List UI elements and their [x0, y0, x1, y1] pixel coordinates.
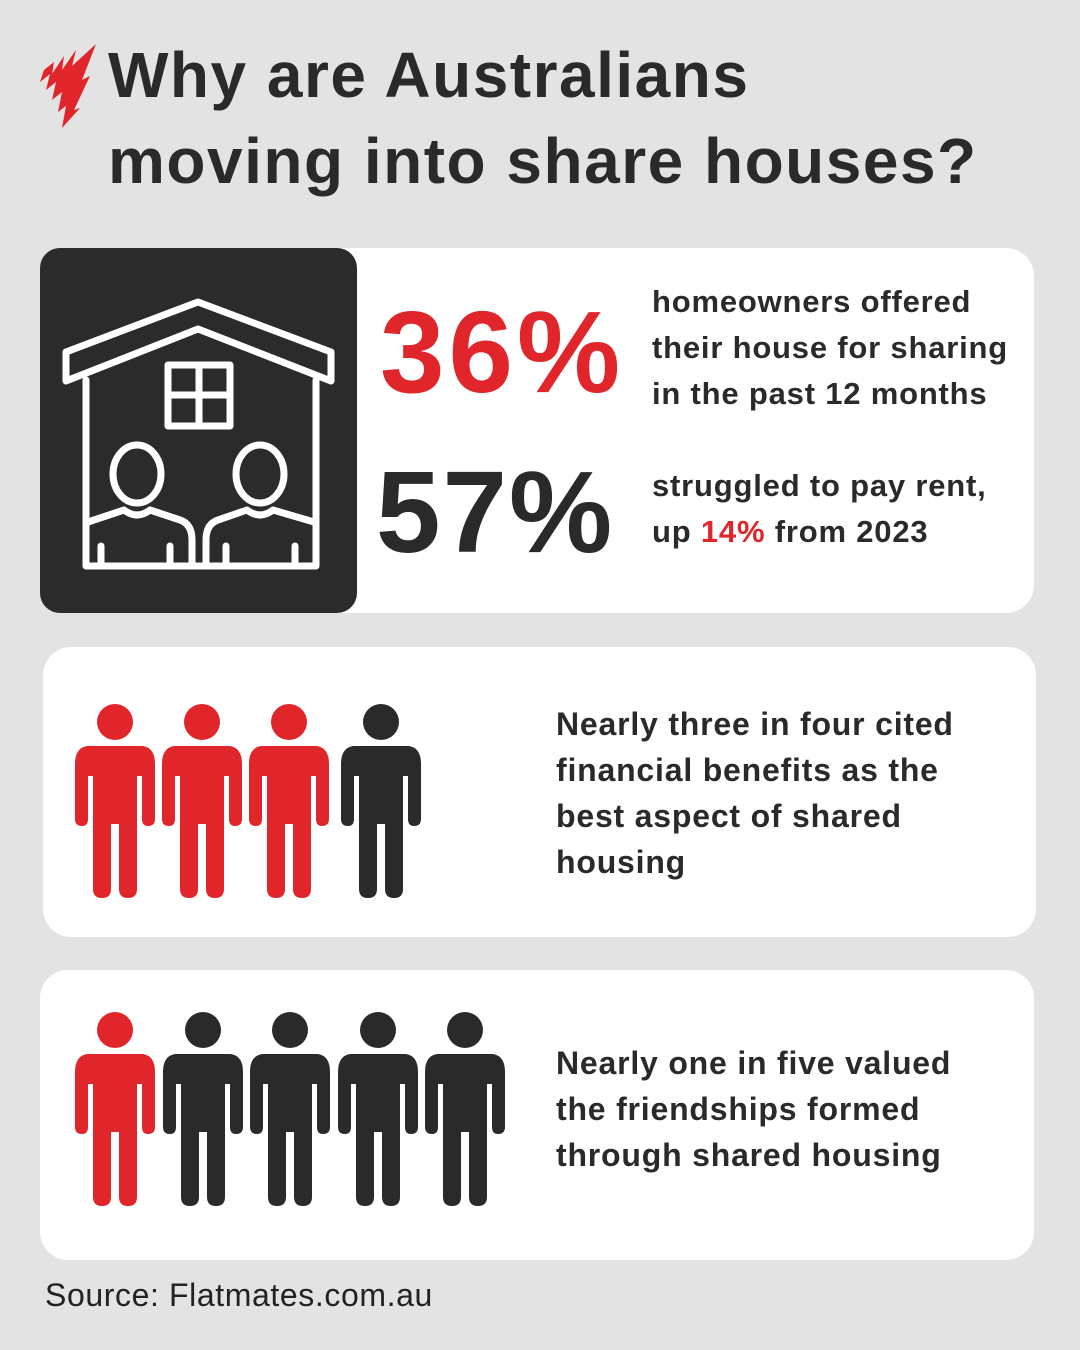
- panel: stats: [40, 248, 1034, 613]
- text: homeowners: [652, 284, 1008, 411]
- text: financial: housing: [556, 844, 686, 880]
- text: financial: financial benefits as the: [556, 752, 939, 788]
- text: homeowners: their house for sharing: [652, 330, 1008, 365]
- text: homeowners: homeowners offered: [652, 284, 971, 319]
- title: Why are Australians: [108, 39, 749, 111]
- logo: [40, 44, 96, 128]
- text: rent: up 14% from 2023: [652, 514, 928, 549]
- text: homeowners: in the past 12 months: [652, 376, 987, 411]
- icon: three in four people: [75, 704, 421, 898]
- text: friendships: through shared housing: [556, 1137, 942, 1173]
- stat: 57%: 57%: [376, 447, 614, 577]
- panel: financial benefits: [43, 647, 1036, 937]
- text: friendships: [556, 1045, 951, 1173]
- text: friendships: Nearly one in five valued: [556, 1045, 951, 1081]
- text: rent: [652, 468, 987, 549]
- text: rent: struggled to pay rent,: [652, 468, 987, 503]
- stat: 36%: 36%: [380, 287, 624, 417]
- panel: friendships: [40, 970, 1034, 1260]
- icon: one in five people: [75, 1012, 505, 1206]
- text: financial: [556, 706, 954, 880]
- icon: house with people: [40, 248, 357, 613]
- text: financial: Nearly three in four cited: [556, 706, 954, 742]
- text: friendships: the friendships formed: [556, 1091, 920, 1127]
- title: moving into share houses?: [108, 125, 978, 197]
- text: financial: best aspect of shared: [556, 798, 902, 834]
- source: Source: Flatmates.com.au: [45, 1277, 433, 1313]
- title: [108, 39, 978, 197]
